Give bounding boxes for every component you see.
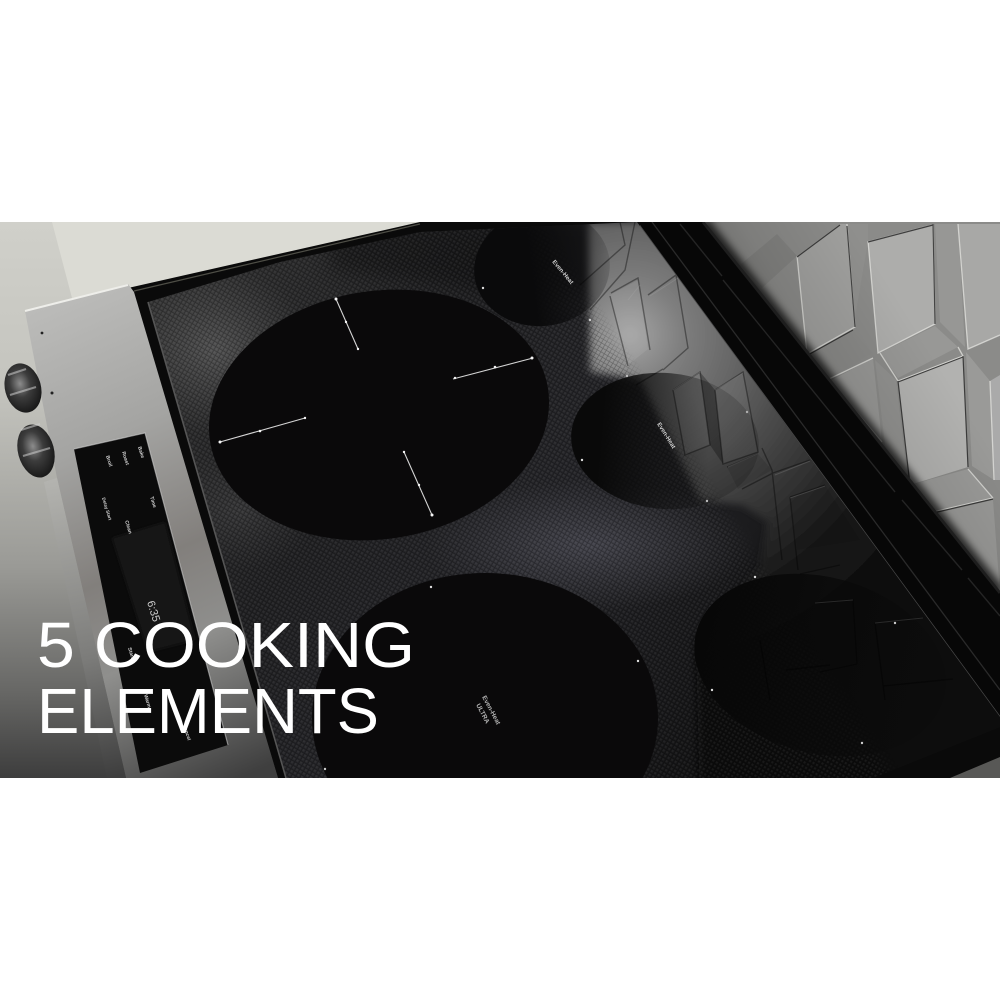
display text: Roast — [120, 451, 130, 466]
display text: Bake — [136, 446, 145, 459]
display text — [101, 446, 192, 742]
display text: 6:35 — [144, 599, 162, 623]
display text: Cancel — [181, 724, 192, 742]
side rail — [640, 222, 1000, 717]
display text: Broil — [104, 455, 113, 468]
reflected wall tiles — [581, 222, 923, 624]
bright glass rim line — [148, 302, 286, 778]
knob 2 — [17, 423, 55, 478]
burner: bottom right — [694, 574, 896, 756]
photo of cooktop — [0, 222, 1000, 778]
bottom right counter corner — [950, 757, 1000, 778]
burner: small top right — [474, 224, 610, 326]
title line 1: 5 COOKING — [37, 609, 415, 681]
title — [37, 609, 415, 747]
highlight near left edge — [156, 289, 277, 412]
white backsplash block — [52, 222, 430, 298]
display text: Start — [126, 647, 135, 660]
display text: Warm — [142, 694, 152, 709]
burner: middle right — [571, 372, 758, 510]
display text: Clean — [123, 520, 133, 535]
burner: large bottom left: Even-Heat — [480, 695, 502, 727]
title line 2: ELEMENTS — [37, 675, 379, 747]
top frame edge highlight — [134, 224, 420, 291]
burner: small top right: Even-Heat — [550, 259, 574, 286]
oven display panel — [74, 433, 228, 773]
burner: large bottom left: ULTRA — [474, 703, 491, 725]
panel indicator marks — [41, 332, 43, 334]
side trim strip — [82, 659, 83, 660]
display text: Time — [148, 496, 157, 509]
counter background — [0, 222, 278, 778]
burner: large top left — [209, 290, 549, 540]
wall tiles — [703, 222, 1000, 593]
knob 1 — [4, 363, 42, 413]
mesh texture — [149, 229, 884, 778]
glass cooktop surface — [148, 222, 1000, 778]
display text: Delay Start — [101, 497, 113, 521]
blue sheen in centre — [466, 496, 722, 596]
tile reflection base — [588, 222, 1000, 800]
stove frame — [128, 222, 640, 778]
dark top strip — [332, 229, 492, 284]
stainless control panel — [25, 284, 278, 778]
burner: large bottom left — [312, 573, 658, 778]
burner: middle right: Even-Heat — [655, 422, 676, 450]
